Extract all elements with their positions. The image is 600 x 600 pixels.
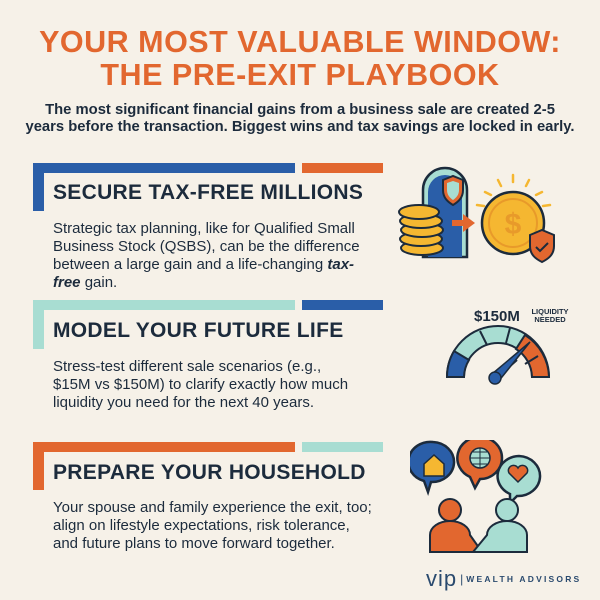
body text: Your spouse and family experience the exit, too; (53, 499, 372, 516)
subtitle: The most significant financial gains from a business sale are created 2-5 (45, 102, 555, 118)
body text: $15M vs $150M) to clarify exactly how much liquidity you need for the next 40 years. (53, 376, 348, 411)
logo: vip| WEALTH ADVISORS (426, 566, 581, 591)
icon: liquidity gauge: $150M (474, 308, 520, 325)
icon: liquidity gauge (446, 307, 569, 385)
icon: coins to tax-free coin: $ (505, 208, 522, 241)
body text: and future plans to move forward together. (53, 535, 335, 552)
icon: liquidity gauge: NEEDED (534, 315, 566, 324)
body text: Business Stock (QSBS), can be the difference between a large gain and a life-changing tax-free gain. (53, 238, 360, 291)
heading: MODEL YOUR FUTURE LIFE (53, 319, 344, 342)
panel: secure tax-free millions (33, 163, 383, 291)
subtitle (25, 102, 575, 135)
body text: Strategic tax planning, like for Qualified Small (53, 220, 355, 237)
subtitle: years before the transaction. Biggest wins and tax savings are locked in early. (25, 119, 575, 135)
title: THE PRE-EXIT PLAYBOOK (100, 58, 500, 92)
heading: SECURE TAX-FREE MILLIONS (53, 181, 363, 204)
icon: liquidity gauge: LIQUIDITY (531, 307, 569, 316)
body text (53, 358, 348, 411)
panel: model your future life (33, 300, 383, 411)
icon: household people with speech bubbles (410, 440, 542, 553)
panel: prepare your household (33, 442, 383, 552)
title: YOUR MOST VALUABLE WINDOW: (39, 25, 561, 59)
body text: align on lifestyle expectations, risk tolerance, (53, 517, 350, 534)
icon: coins to tax-free coin (398, 166, 555, 264)
title (39, 25, 561, 92)
heading: PREPARE YOUR HOUSEHOLD (53, 461, 366, 484)
body text: Stress-test different sale scenarios (e.g., (53, 358, 321, 375)
body text (53, 499, 372, 552)
